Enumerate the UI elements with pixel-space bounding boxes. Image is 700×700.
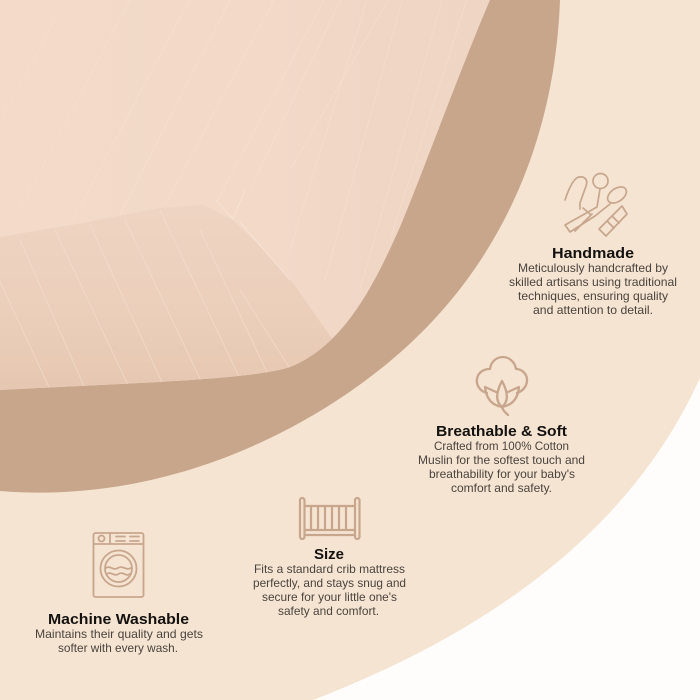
feature: Breathable & Soft — [418, 357, 585, 495]
description: secure for your little one's — [262, 590, 397, 604]
description: Meticulously handcrafted by — [518, 261, 668, 275]
description: softer with every wash. — [58, 641, 178, 655]
heading: Handmade — [552, 245, 634, 262]
tan arc shape — [0, 0, 560, 493]
icon: washing machine — [94, 533, 144, 597]
product photo: fitted sheet — [0, 0, 500, 400]
feature: Handmade — [509, 174, 677, 317]
heading: Size — [314, 546, 344, 563]
icon: scissors and thread — [565, 174, 629, 236]
description: safety and comfort. — [278, 604, 379, 618]
sheet front panel — [0, 222, 332, 390]
description: Muslin for the softest touch and — [418, 453, 585, 467]
description: Maintains their quality and gets — [35, 627, 203, 641]
description: comfort and safety. — [451, 481, 552, 495]
heading: Breathable & Soft — [436, 423, 567, 440]
feature: Machine Washable — [35, 533, 203, 655]
heading: Machine Washable — [48, 611, 189, 628]
description: skilled artisans using traditional — [509, 275, 677, 289]
description: and attention to detail. — [533, 303, 653, 317]
feature: Size — [253, 498, 406, 618]
description: perfectly, and stays snug and — [253, 576, 406, 590]
description: Crafted from 100% Cotton — [434, 439, 569, 453]
description: breathability for your baby's — [429, 467, 575, 481]
description: Fits a standard crib mattress — [254, 562, 405, 576]
sheet top surface — [0, 0, 500, 400]
icon: crib — [300, 498, 360, 539]
icon: cotton boll — [477, 357, 527, 415]
sheet corner seam — [215, 190, 290, 280]
description: techniques, ensuring quality — [518, 289, 668, 303]
